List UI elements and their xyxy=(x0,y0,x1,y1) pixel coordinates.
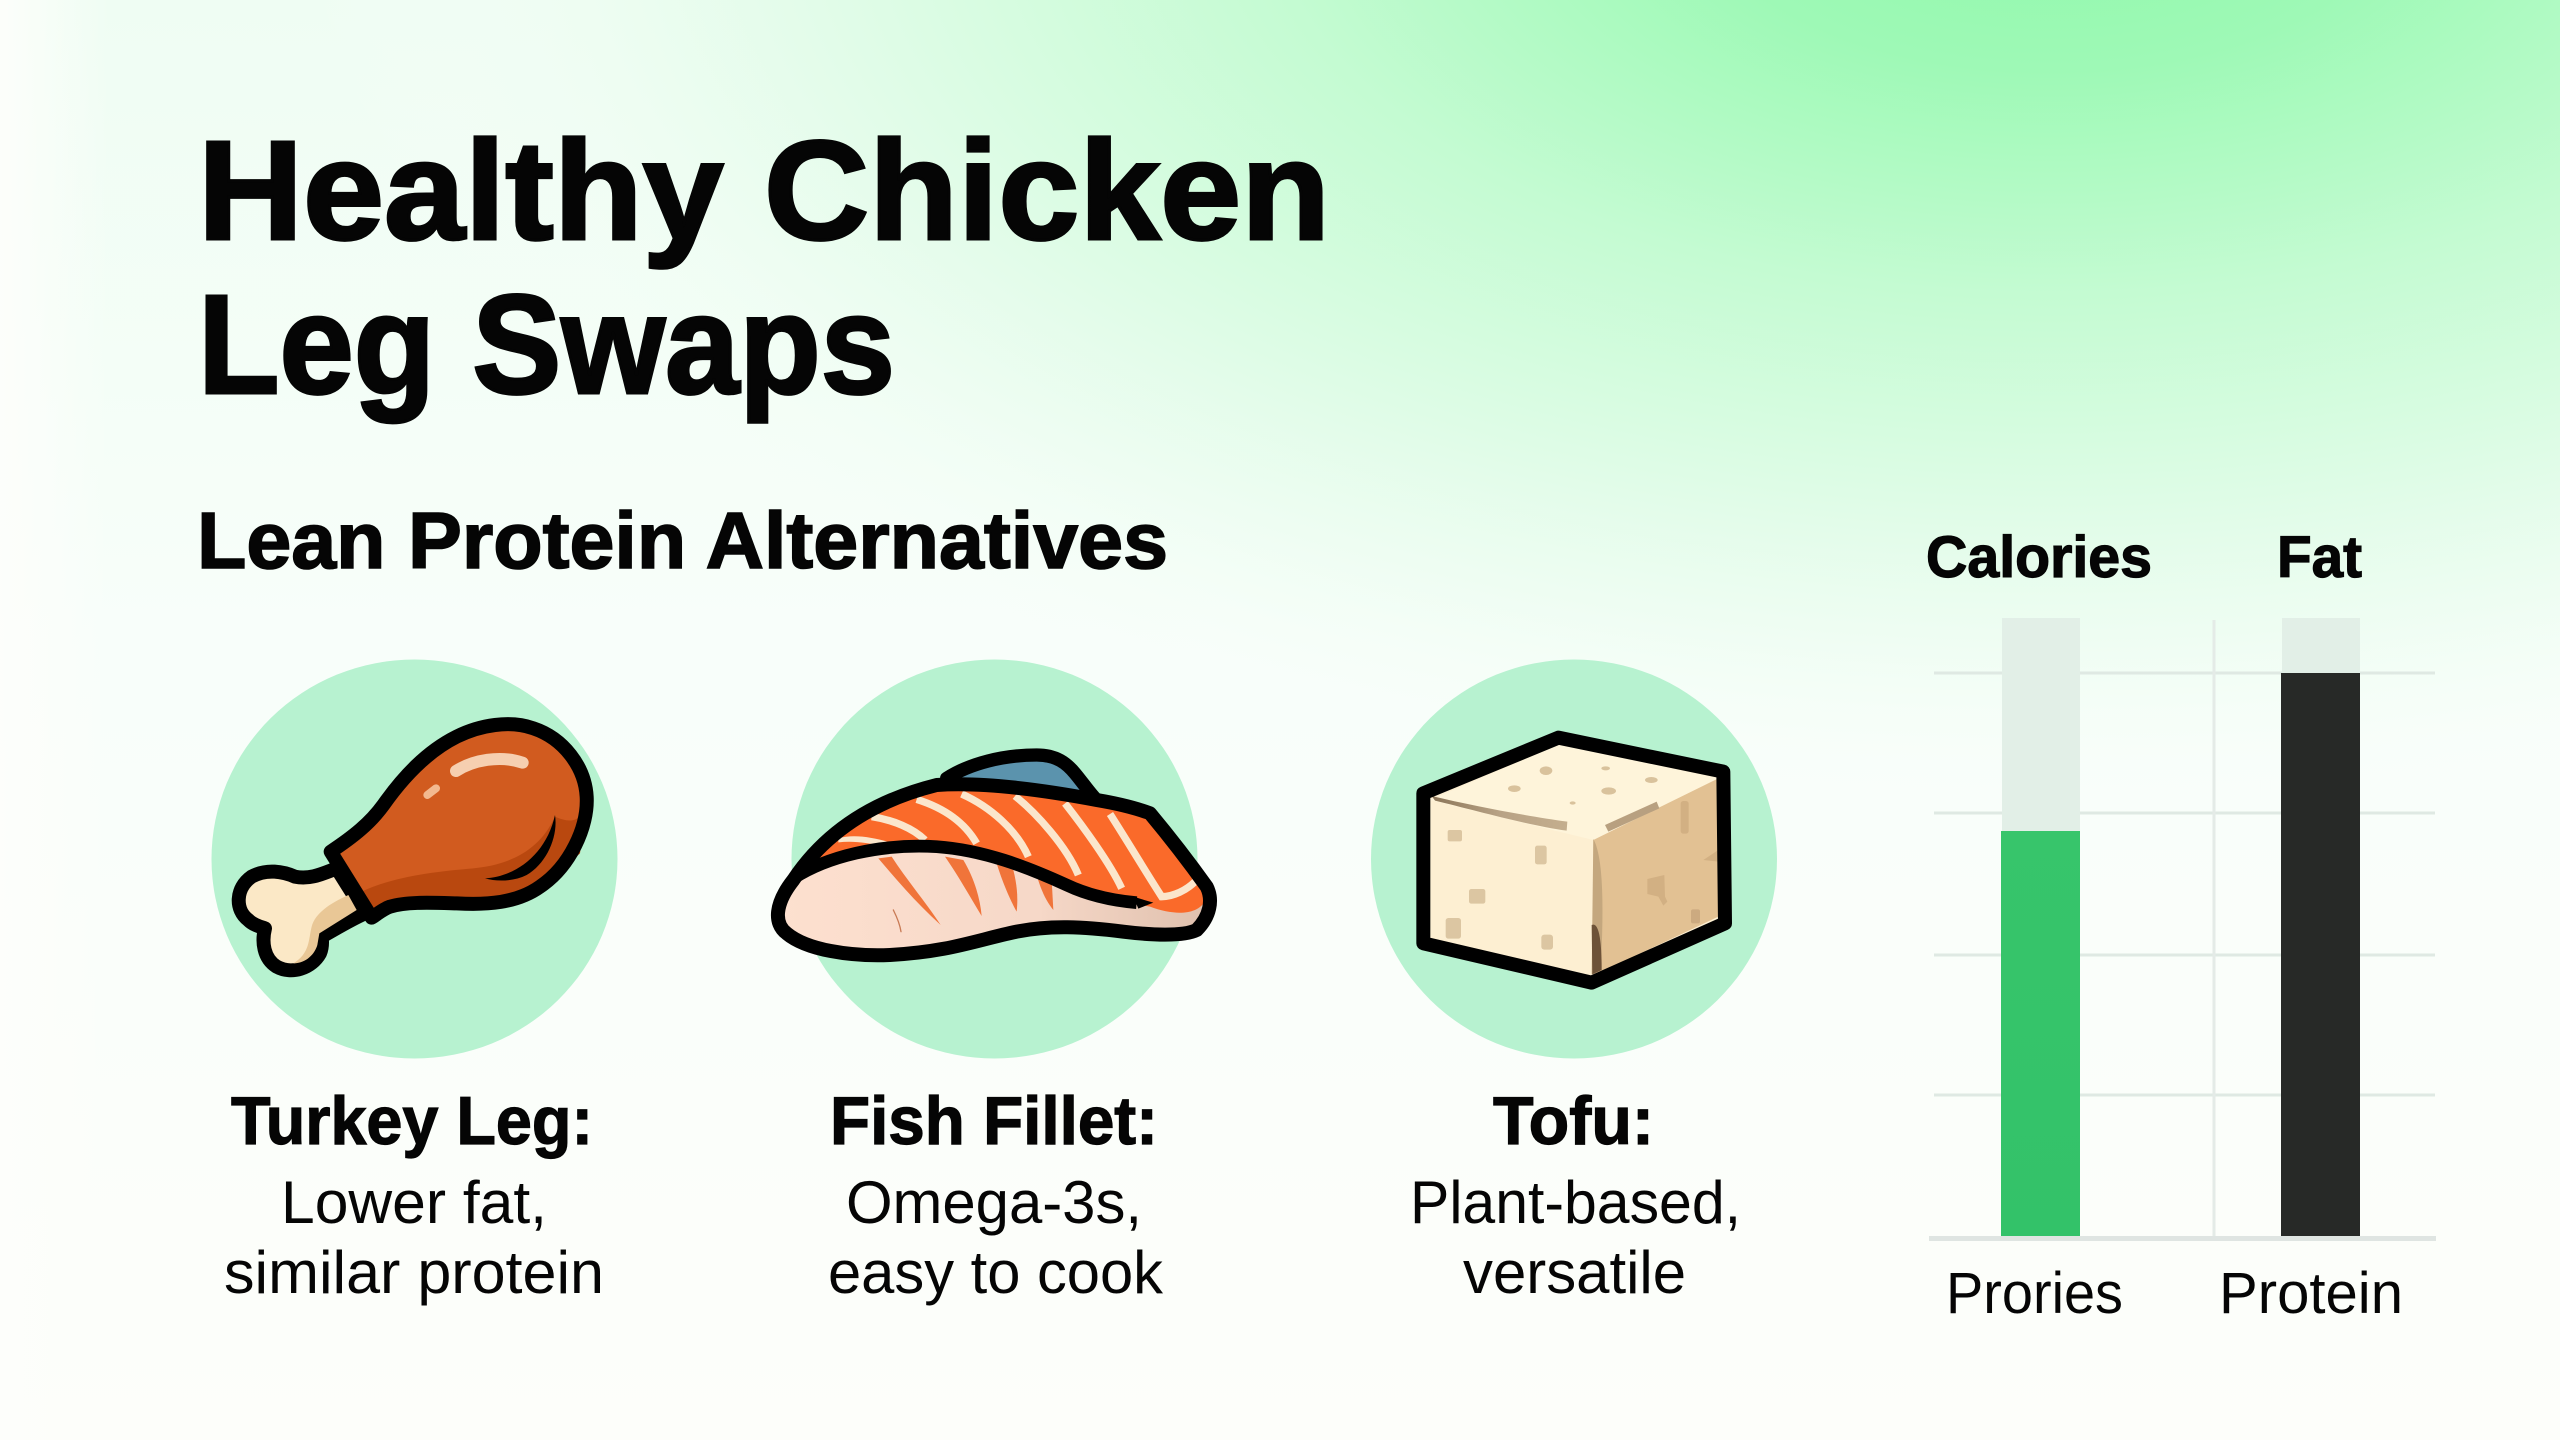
panel: turkey leg xyxy=(212,660,618,1306)
caption: turkey leg: Lower fat, xyxy=(281,1169,547,1236)
chart label: Calories: Calories xyxy=(1926,525,2152,590)
icon: drumstick xyxy=(212,660,618,1058)
icon: fish fillet xyxy=(778,660,1210,1058)
caption: turkey leg: similar protein xyxy=(224,1239,604,1306)
ghost track: left bar xyxy=(2002,618,2080,831)
panel: tofu xyxy=(1371,660,1777,1306)
caption: fish fillet xyxy=(828,1083,1164,1306)
title: Healthy Chicken xyxy=(198,111,1330,269)
caption: turkey leg xyxy=(224,1083,604,1306)
caption: tofu: versatile xyxy=(1463,1239,1686,1306)
panel: fish fillet xyxy=(778,660,1210,1306)
caption: tofu: Tofu: xyxy=(1493,1083,1654,1159)
caption: turkey leg: Turkey Leg: xyxy=(231,1083,593,1159)
caption: tofu xyxy=(1410,1083,1741,1306)
subtitle: Lean Protein Alternatives xyxy=(197,496,1168,585)
title: Leg Swaps xyxy=(198,265,895,423)
bar chart xyxy=(1926,525,2436,1326)
caption: tofu: Plant-based, xyxy=(1410,1169,1741,1236)
chart label: Prories: Prories xyxy=(1946,1261,2123,1326)
title xyxy=(198,111,1330,423)
caption: fish fillet: easy to cook xyxy=(828,1239,1164,1306)
icon: tofu xyxy=(1371,660,1777,1058)
chart baseline xyxy=(1929,1236,2436,1241)
caption: fish fillet: Omega-3s, xyxy=(846,1169,1142,1236)
chart label: Fat: Fat xyxy=(2277,525,2362,590)
chart gridlines xyxy=(1934,620,2435,1239)
caption: fish fillet: Fish Fillet: xyxy=(830,1083,1158,1159)
bar: green xyxy=(2001,831,2080,1236)
chart label: Protein: Protein xyxy=(2219,1261,2403,1326)
ghost track: right bar xyxy=(2282,618,2360,673)
bar: dark xyxy=(2281,673,2360,1236)
